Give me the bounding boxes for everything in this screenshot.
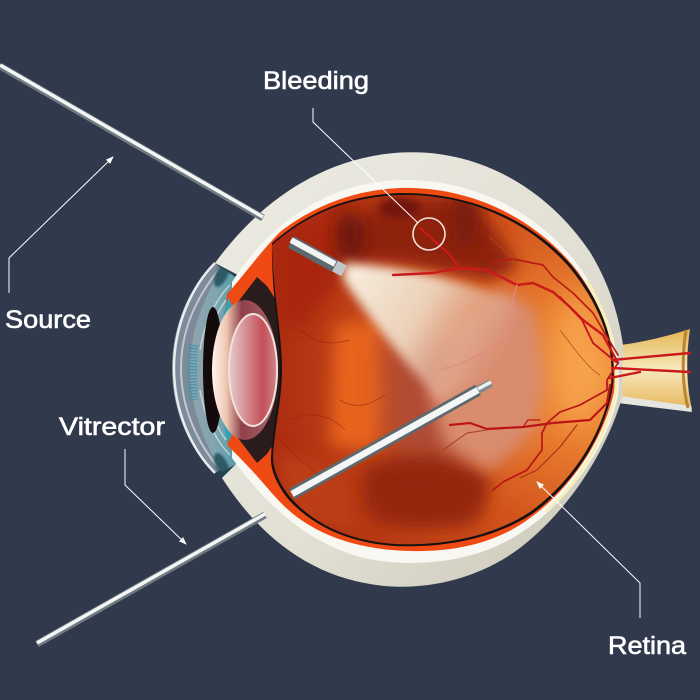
callout: Source: Source [5,306,91,334]
middle brown shadow under the cone [385,330,480,480]
eyeball: sclera [215,152,623,587]
callout: Retina: Retina [608,632,686,660]
retina interior [272,195,612,544]
iris teal tips [223,297,232,443]
right glow [560,290,596,430]
choroid: orange-red layer [222,188,616,551]
lower left red [273,453,346,534]
callout: Bleeding: Bleeding [263,67,369,95]
top dark bleed [335,196,518,280]
icon: optic nerve [612,329,692,412]
light cone [343,263,515,402]
callout: Source [5,157,113,334]
upper left red [270,200,345,330]
callout: Vitrector [59,413,186,544]
cornea and iris [172,259,240,481]
callout: Retina [537,482,686,660]
callout: Vitrector: Vitrector [59,413,165,441]
instrument: vitrector [37,382,491,644]
ciliary body and dark vitreous edge [238,193,614,546]
sclera inner white band [232,180,619,563]
retinal blood vessels [393,228,690,490]
callout: Bleeding [263,67,445,250]
lower dark bleed [361,455,490,528]
lens [212,300,278,440]
pale central detached area [428,288,546,472]
faint retina veins [280,330,600,480]
instrument: light source probe [0,65,344,271]
left orange patch [330,320,388,450]
